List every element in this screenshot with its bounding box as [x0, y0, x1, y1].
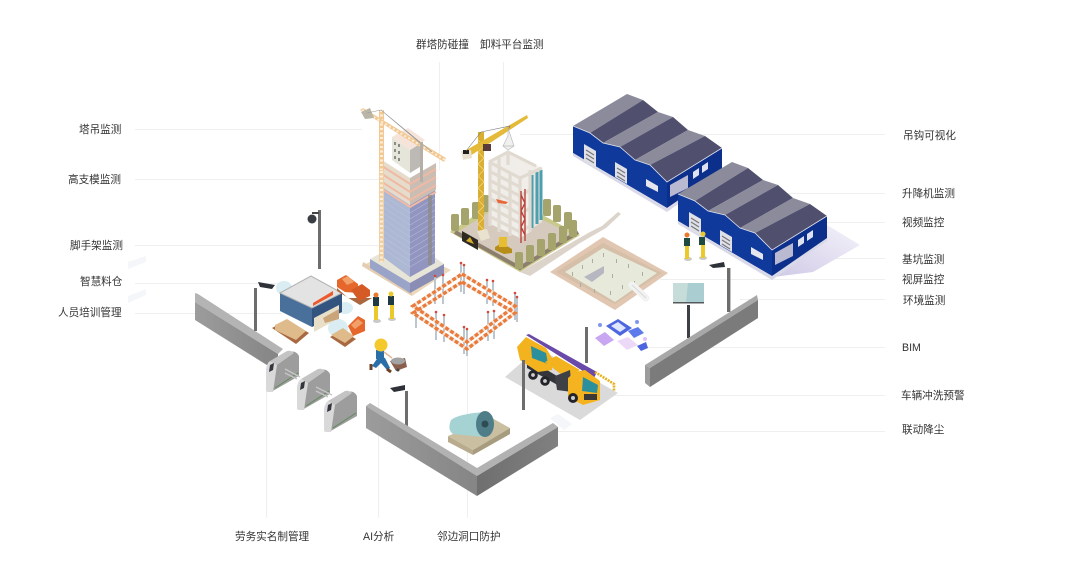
- teal facade: [530, 170, 542, 230]
- label: 劳务实名制管理: 劳务实名制管理: [235, 530, 310, 543]
- warehouse 2: [678, 162, 827, 280]
- floor lines: [383, 195, 435, 267]
- pallets: [272, 320, 309, 344]
- bottom wall: [366, 403, 558, 496]
- white pipe: [632, 285, 646, 298]
- label: 视频监控: 视频监控: [902, 216, 945, 229]
- label: 智慧料仓: 智慧料仓: [80, 275, 123, 288]
- left wall: [195, 293, 283, 372]
- faint background marks: [128, 256, 572, 430]
- hook load: [503, 128, 514, 150]
- right wall: [645, 295, 758, 387]
- tower crane right: [461, 115, 528, 241]
- label: 脚手架监测: 脚手架监测: [70, 239, 123, 252]
- cab front: [568, 370, 600, 405]
- orange platform: [496, 199, 508, 204]
- orange barrier fence: [413, 262, 518, 356]
- shadow: [520, 212, 621, 276]
- left wall: [280, 293, 312, 327]
- left scaffold: [379, 162, 384, 262]
- posts: [416, 264, 517, 356]
- right wall: [312, 293, 342, 327]
- turnstile 1: [266, 351, 300, 392]
- backing: [489, 152, 542, 238]
- label: 环境监测: 环境监测: [903, 294, 945, 307]
- leader lines: [135, 62, 885, 518]
- halos: [276, 281, 292, 295]
- BIM icons: [595, 319, 648, 351]
- flatbed: [545, 356, 580, 378]
- running worker: [371, 338, 407, 372]
- core: [392, 137, 410, 173]
- tower crane left: [360, 108, 446, 182]
- camera pole with dome: [308, 210, 321, 269]
- dust fan: [448, 411, 510, 455]
- camera pole right: [709, 262, 730, 312]
- label: AI分析: AI分析: [363, 530, 395, 543]
- label: 视屏监控: 视屏监控: [902, 273, 945, 286]
- sign: [313, 291, 333, 306]
- label: 吊钩可视化: 吊钩可视化: [903, 129, 956, 142]
- label: 升降机监测: 升降机监测: [902, 187, 955, 200]
- frame building under construction: [489, 152, 542, 254]
- foundation pit: [550, 237, 668, 310]
- truck crane: [505, 334, 618, 420]
- concrete frame: [489, 152, 542, 238]
- label: 高支模监测: 高支模监测: [68, 173, 121, 186]
- site wall: [455, 232, 578, 268]
- sign: [462, 231, 478, 250]
- workers near tower: [373, 292, 396, 323]
- roof: [280, 276, 342, 308]
- turnstile 2: [297, 369, 332, 410]
- forklifts: [337, 275, 372, 336]
- right face: [410, 190, 435, 277]
- label: 卸料平台监测: 卸料平台监测: [480, 38, 544, 51]
- pole near truck: [522, 360, 525, 410]
- label: 邻边洞口防护: 邻边洞口防护: [437, 530, 501, 543]
- label: 塔吊监测: 塔吊监测: [79, 123, 121, 136]
- label: 人员培训管理: 人员培训管理: [58, 306, 122, 319]
- mast: [478, 132, 484, 233]
- cab rear: [517, 337, 552, 372]
- workers near warehouse: [684, 232, 707, 261]
- sand base: [362, 246, 451, 296]
- label: 车辆冲洗预警: 车辆冲洗预警: [901, 389, 965, 402]
- door: [314, 305, 339, 332]
- ground: [450, 195, 580, 272]
- boom tip: [595, 372, 614, 391]
- trees: [451, 195, 577, 269]
- red hoist: [521, 189, 525, 243]
- main tower building: [360, 108, 451, 296]
- tie cables: [466, 126, 510, 151]
- label: BIM: BIM: [902, 342, 921, 354]
- plate: [505, 348, 618, 420]
- warehouse 2 shadow: [773, 225, 860, 277]
- upper band: [382, 160, 410, 205]
- storage house: [272, 276, 356, 347]
- camera pole left: [254, 282, 275, 331]
- rails: [413, 274, 515, 349]
- warehouse 1: [573, 94, 722, 212]
- wheels: [528, 370, 538, 380]
- billboard: [673, 283, 704, 338]
- label: 联动降尘: 联动降尘: [902, 423, 945, 436]
- building site platform: [450, 195, 621, 276]
- label: 基坑监测: 基坑监测: [902, 253, 944, 266]
- camera pole bottom: [390, 385, 408, 427]
- right scaffold: [428, 195, 432, 265]
- left face: [383, 187, 410, 277]
- boom: [526, 334, 597, 378]
- frame: [527, 358, 572, 393]
- turnstile 3: [324, 391, 357, 432]
- bulldozer: [495, 237, 512, 254]
- label: 群塔防碰撞: 群塔防碰撞: [416, 38, 469, 51]
- pole by truck: [585, 327, 588, 363]
- engine: [555, 370, 572, 392]
- base slab: [370, 238, 444, 283]
- post tips: [434, 262, 518, 330]
- jib: [463, 115, 528, 156]
